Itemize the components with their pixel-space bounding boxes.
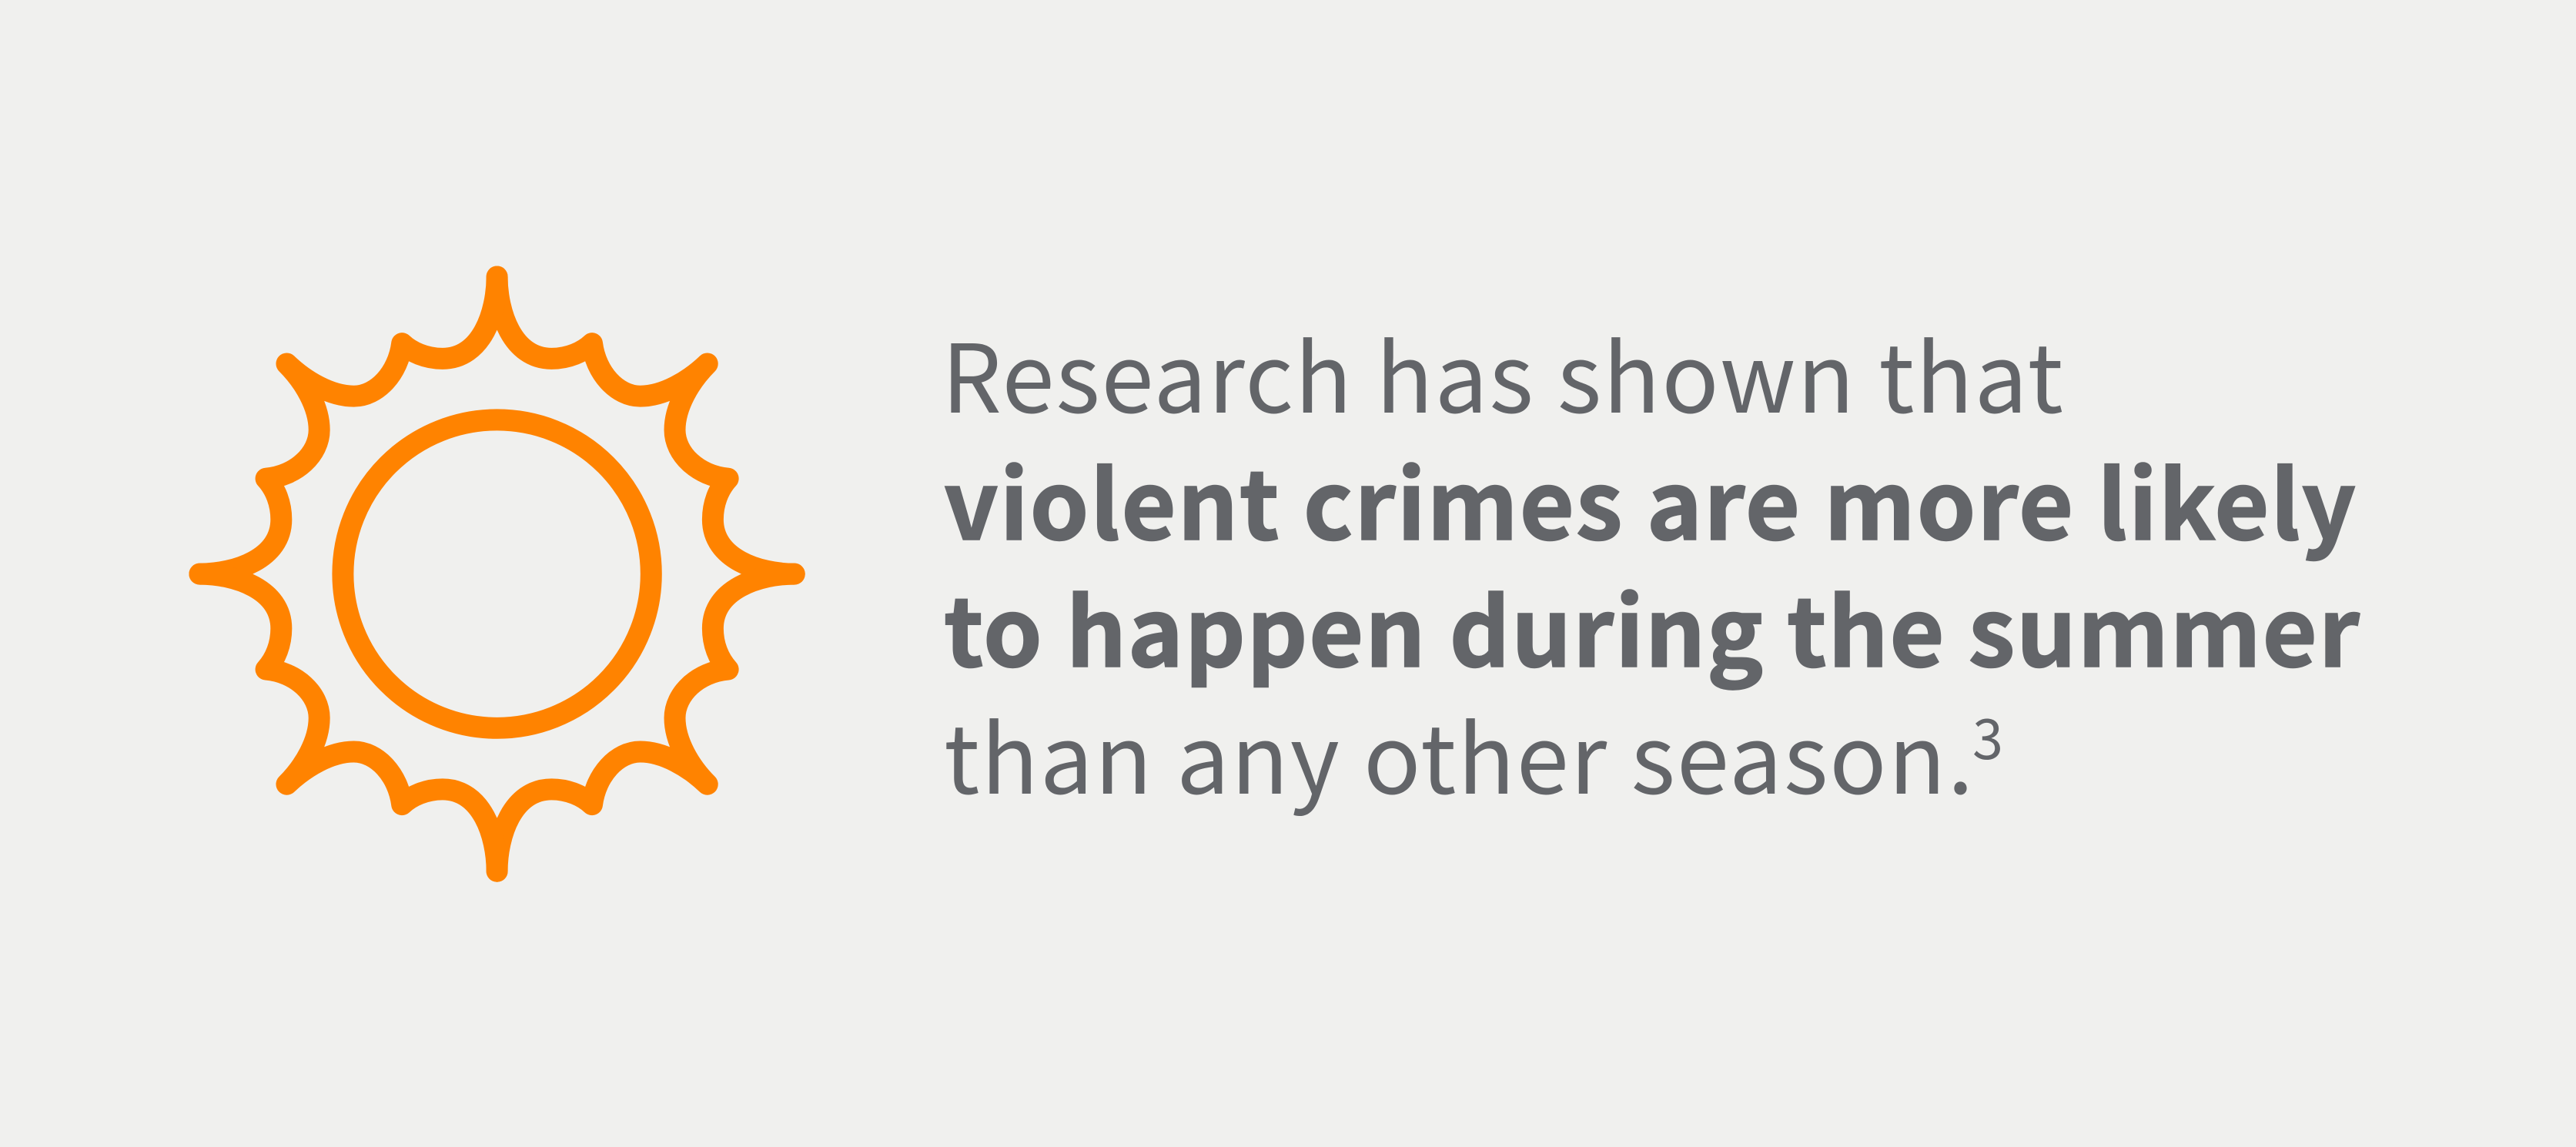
text line 4: than any other season. xyxy=(944,684,1975,821)
text block: research statement xyxy=(942,303,2360,821)
text line 1: Research has shown that xyxy=(942,303,2064,440)
text line 3 bold: to happen during the summer xyxy=(944,557,2360,694)
footnote marker: 3 xyxy=(1972,694,2003,775)
icon: orange sun outline xyxy=(199,276,795,871)
text line 2 bold: violent crimes are more likely xyxy=(944,430,2357,567)
